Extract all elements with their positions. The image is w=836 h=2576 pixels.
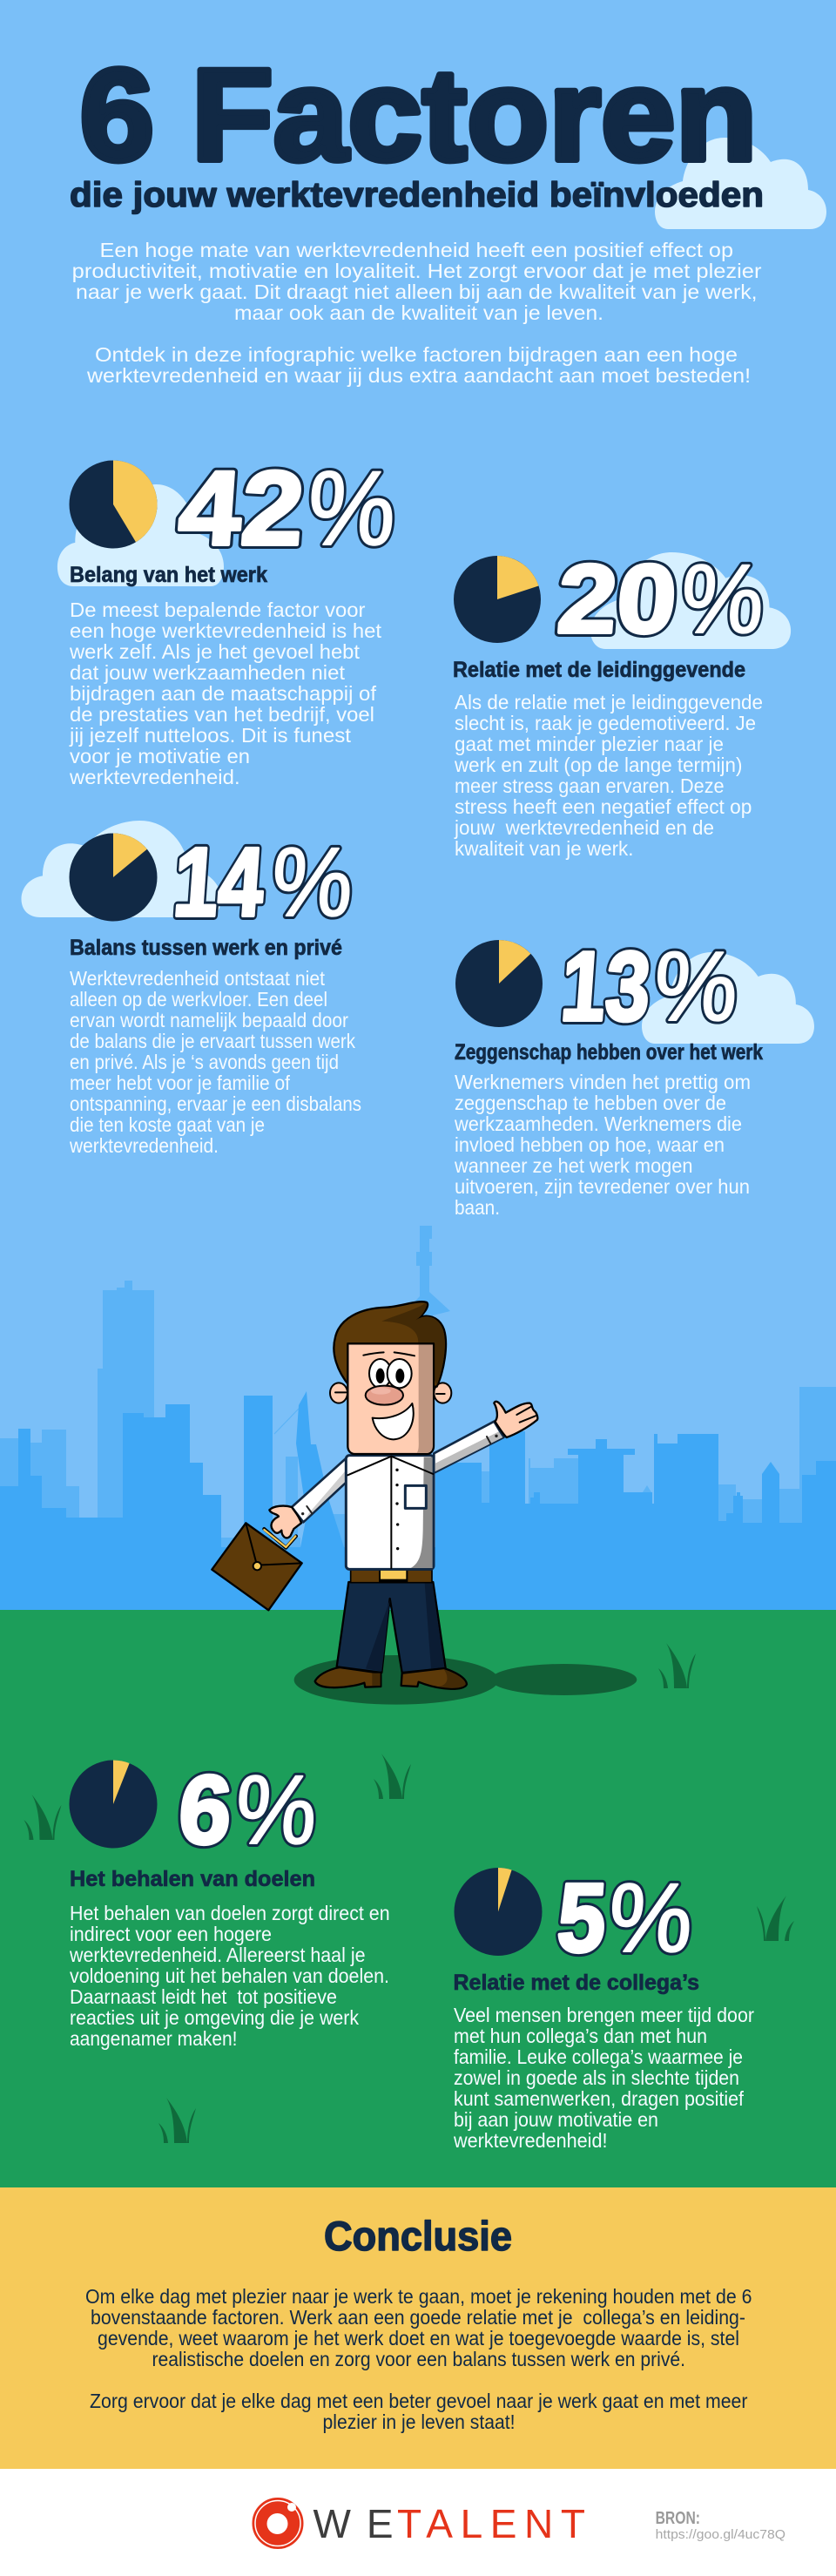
number 6%: 6 — [175, 1755, 235, 1864]
paragraph: Het behalen van doelen zorgt direct en — [70, 1902, 390, 1924]
number 14% — [170, 827, 357, 936]
number 13%: 13 — [557, 931, 654, 1041]
number 6% — [175, 1755, 320, 1864]
paragraph: De meest bepalende factor voor — [70, 598, 366, 621]
intro text: maar ook aan de kwaliteit van je leven. — [234, 301, 603, 324]
heading: Belang van het werk — [70, 563, 267, 587]
pie chart 6% — [70, 1760, 157, 1849]
paragraph — [453, 2004, 754, 2152]
paragraph: invloed hebben op hoe, waar en — [455, 1133, 725, 1156]
paragraph: ontspanning, ervaar je een disbalans — [70, 1092, 361, 1115]
paragraph — [454, 1071, 751, 1219]
number 5%: % — [605, 1863, 697, 1972]
raised arm — [434, 1422, 503, 1473]
paragraph: voldoening uit het behalen van doelen. — [70, 1964, 389, 1987]
footer — [0, 2469, 836, 2576]
heading: Balans tussen werk en privé — [70, 936, 342, 960]
paragraph: die ten koste gaat van je — [70, 1113, 265, 1136]
paragraph: slecht is, raak je gedemotiveerd. Je — [455, 712, 756, 734]
shirt — [346, 1456, 434, 1569]
paragraph: gaat met minder plezier naar je — [455, 733, 724, 755]
cloud behind 14% — [21, 821, 221, 917]
heading: Relatie met de collega’s — [453, 1971, 699, 1995]
number 6%: 6 — [175, 1755, 235, 1864]
shadow — [294, 1655, 637, 1705]
conclusion text — [85, 2285, 752, 2433]
paragraph: reacties uit je omgeving die je werk — [70, 2006, 359, 2029]
number 42%: 42 — [175, 449, 308, 567]
briefcase handle — [264, 1529, 296, 1548]
paragraph: baan. — [455, 1196, 500, 1219]
number 5%: 5 — [554, 1863, 610, 1972]
source — [656, 2509, 785, 2542]
panel: 42% belang van het werk — [57, 449, 400, 788]
panel: 20% relatie met de leidinggevende — [453, 544, 791, 860]
paragraph: Als de relatie met je leidinggevende — [455, 691, 763, 713]
paragraph: ervan wordt namelijk bepaald door — [70, 1009, 348, 1031]
panel: conclusie — [0, 2187, 836, 2469]
paragraph: jouw werktevredenheid en de — [454, 816, 714, 839]
number 6%: % — [232, 1755, 320, 1864]
paragraph: en privé. Als je ‘s avonds geen tijd — [70, 1051, 339, 1073]
hair — [334, 1302, 446, 1387]
number 14%: % — [268, 827, 357, 936]
paragraph — [69, 598, 382, 788]
number 14%: % — [268, 827, 357, 936]
paragraph: voor je motivatie en — [70, 745, 250, 767]
paragraph: alleen op de werkvloer. Een deel — [70, 988, 327, 1011]
number 13%: % — [651, 931, 742, 1041]
logo wordmark: WE — [314, 2501, 394, 2546]
number 5%: % — [605, 1863, 697, 1972]
holding hand — [269, 1506, 301, 1538]
pie chart 13% — [455, 940, 543, 1027]
paragraph — [69, 967, 361, 1157]
intro text: Ontdek in deze infographic welke factoren bijdragen aan een hoge — [95, 343, 738, 366]
paragraph: werk en zult (op de lange termijn) — [454, 754, 742, 776]
conclusion text: bovenstaande factoren. Werk aan een goede relatie met je collega’s en leiding- — [91, 2306, 745, 2329]
logo icon — [253, 2498, 303, 2548]
grass tuft bottom left — [158, 2098, 196, 2143]
pie chart 5% — [455, 1868, 542, 1956]
paragraph: uitvoeren, zijn tevredener over hun — [455, 1175, 750, 1198]
paragraph: de prestaties van het bedrijf, voel — [70, 703, 374, 726]
briefcase — [212, 1523, 302, 1610]
panel: 13% zeggenschap — [454, 931, 814, 1219]
grass tuft far left — [24, 1795, 61, 1840]
paragraph: aangenamer maken! — [70, 2027, 237, 2050]
pie chart 20% — [454, 556, 541, 643]
title: 6 Factoren — [80, 42, 758, 188]
number 20%: % — [678, 544, 768, 653]
cloud behind 20% — [590, 552, 791, 649]
cloud: top right behind title — [655, 138, 826, 229]
panel: 6% het behalen van doelen — [69, 1755, 390, 2050]
paragraph: werktevredenheid. — [69, 1134, 219, 1157]
intro text: productiviteit, motivatie en loyaliteit. Het zorgt ervoor dat je met plezier — [72, 260, 762, 282]
ears — [330, 1383, 451, 1403]
number 42%: 42 — [175, 449, 308, 567]
trousers — [337, 1582, 446, 1673]
cloud behind 42% — [57, 484, 224, 586]
paragraph: Werknemers vinden het prettig om — [455, 1071, 751, 1093]
paragraph: werktevredenheid. — [69, 766, 240, 788]
paragraph: meer hebt voor je familie of — [70, 1072, 291, 1094]
paragraph: meer stress gaan ervaren. Deze — [455, 774, 725, 797]
source: https://goo.gl/4uc78Q — [656, 2527, 785, 2542]
conclusion text: gevende, weet waarom je het werk doet en wat je toegevoegde waarde is, stel — [98, 2327, 739, 2350]
conclusion heading: Conclusie — [324, 2213, 512, 2259]
paragraph: kunt samenwerken, dragen positief — [454, 2087, 745, 2110]
pie chart 14% — [70, 833, 157, 922]
paragraph: dat jouw werkzaamheden niet — [70, 661, 346, 684]
paragraph: Daarnaast leidt het tot positieve — [70, 1985, 337, 2008]
cloud behind 13% — [642, 952, 814, 1044]
number 13%: 13 — [557, 931, 654, 1041]
paragraph: Werktevredenheid ontstaat niet — [70, 967, 326, 990]
number 20%: % — [678, 544, 768, 653]
paragraph: kwaliteit van je werk. — [455, 837, 634, 860]
grass tuft left top — [374, 1754, 411, 1799]
grass tuft right — [757, 1896, 794, 1941]
pie chart 42% — [70, 460, 158, 549]
subtitle: die jouw werktevredenheid beïnvloeden — [70, 176, 764, 214]
number 20% — [554, 544, 768, 653]
heading: Het behalen van doelen — [70, 1867, 315, 1891]
paragraph: met hun collega’s dan met hun — [454, 2025, 707, 2047]
figure: businessman waving — [212, 1302, 637, 1705]
paragraph: werkzaamheden. Werknemers die — [454, 1112, 742, 1135]
intro text: Een hoge mate van werktevredenheid heeft een positief effect op — [99, 239, 733, 261]
panel: 14% balans tussen werk en prive — [21, 821, 361, 1157]
number 20%: 20 — [554, 544, 680, 653]
belt — [351, 1570, 432, 1583]
paragraph: stress heeft een negatief effect op — [455, 795, 752, 818]
panel: 5% relatie met de collega's — [453, 1863, 754, 2152]
paragraph: werktevredenheid. Allereerst haal je — [69, 1944, 366, 1966]
intro text: werktevredenheid en waar jij dus extra aandacht aan moet besteden! — [86, 364, 751, 387]
number 42%: % — [304, 449, 400, 567]
paragraph: werk zelf. Als je het gevoel hebt — [69, 640, 361, 663]
conclusion text: Zorg ervoor dat je elke dag met een beter gevoel naar je werk gaat en met meer — [90, 2390, 748, 2412]
paragraph: de balans die je ervaart tussen werk — [70, 1030, 355, 1052]
number 20%: 20 — [554, 544, 680, 653]
paragraph — [69, 1902, 390, 2050]
paragraph: bijdragen aan de maatschappij of — [70, 682, 377, 705]
paragraph: zeggenschap te hebben over de — [455, 1092, 726, 1114]
paragraph — [454, 691, 763, 860]
paragraph: zowel in goede als in slechte tijden — [454, 2066, 739, 2089]
grass tuft near figure — [658, 1643, 696, 1688]
number 13%: % — [651, 931, 742, 1041]
conclusion text: plezier in je leven staat! — [322, 2410, 516, 2433]
ground — [0, 1610, 836, 2187]
number 42%: % — [304, 449, 400, 567]
logo wordmark — [314, 2501, 585, 2546]
conclusion text: Om elke dag met plezier naar je werk te gaan, moet je rekening houden met de 6 — [85, 2285, 752, 2308]
number 6%: % — [232, 1755, 320, 1864]
number 42% — [175, 449, 400, 567]
number 5%: 5 — [554, 1863, 610, 1972]
number 13% — [557, 931, 742, 1041]
waving hand — [494, 1402, 537, 1437]
intro text — [72, 239, 762, 387]
shoes — [315, 1667, 467, 1689]
lowered arm — [292, 1458, 346, 1522]
paragraph: een hoge werktevredenheid is het — [70, 619, 382, 642]
city skyline — [0, 1226, 836, 1610]
face — [347, 1343, 434, 1454]
heading: Relatie met de leidinggevende — [453, 658, 745, 682]
number 5% — [554, 1863, 697, 1972]
paragraph: bij aan jouw motivatie en — [454, 2108, 658, 2131]
intro text: naar je werk gaat. Dit draagt niet alleen bij aan de kwaliteit van je werk, — [76, 281, 758, 303]
heading: Zeggenschap hebben over het werk — [455, 1040, 763, 1065]
source: BRON: — [656, 2509, 700, 2528]
paragraph: werktevredenheid! — [453, 2129, 608, 2152]
number 14%: 14 — [170, 827, 267, 936]
paragraph: Veel mensen brengen meer tijd door — [454, 2004, 754, 2026]
number 14%: 14 — [170, 827, 267, 936]
conclusion text: realistische doelen en zorg voor een balans tussen werk en privé. — [152, 2348, 685, 2370]
paragraph: wanneer ze het werk mogen — [454, 1154, 693, 1177]
paragraph: jij jezelf nutteloos. Dit is funest — [69, 724, 352, 747]
paragraph: indirect voor een hogere — [70, 1923, 272, 1945]
logo wordmark: TALENT — [397, 2501, 585, 2546]
paragraph: familie. Leuke collega’s waarmee je — [454, 2045, 743, 2068]
